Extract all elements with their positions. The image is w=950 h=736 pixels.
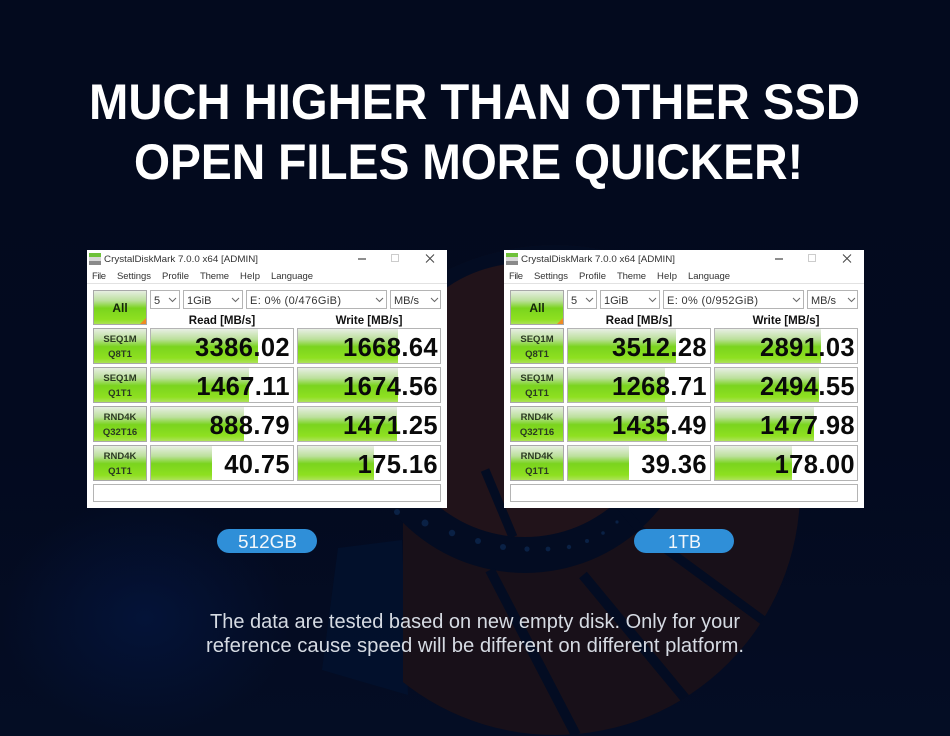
menu bar: Profile (162, 271, 189, 282)
row: SEQ1M Q8T1: 3512.28 (612, 334, 707, 362)
title: MUCH HIGHER THAN OTHER SSD (89, 74, 860, 130)
row: RND4K Q1T1: 175.16 (358, 451, 438, 479)
label: 1TB: 1TB (668, 532, 701, 552)
menu bar: Settings (117, 271, 151, 282)
label: 512GB: 512GB (238, 532, 297, 552)
row: RND4K Q32T16: 1435.49 (612, 412, 707, 440)
row: RND4K Q1T1: 39.36 (641, 451, 707, 479)
menu bar (92, 271, 313, 282)
row: SEQ1M Q1T1 (94, 368, 440, 402)
row: RND4K Q32T16: RND4K (104, 412, 136, 423)
all button: All (112, 301, 128, 315)
row: RND4K Q32T16: 1477.98 (760, 412, 855, 440)
menu bar: Settings (534, 271, 568, 282)
menu bar (509, 271, 730, 282)
dropdowns: 5 (571, 295, 577, 307)
dropdowns: MB/s (811, 295, 837, 307)
window controls (358, 254, 434, 262)
column headers (606, 315, 820, 327)
row: RND4K Q32T16: 1471.25 (343, 412, 438, 440)
disclaimer text (206, 611, 744, 657)
row: RND4K Q32T16 (510, 406, 858, 442)
row: RND4K Q1T1 (510, 446, 858, 480)
background (22, 264, 800, 735)
column headers: Write [MB/s] (336, 315, 403, 327)
disclaimer text: The data are tested based on new empty disk. Only for your (210, 611, 740, 633)
row: SEQ1M Q8T1: SEQ1M (103, 334, 137, 345)
menu bar: Theme (617, 271, 646, 282)
dropdowns (150, 290, 440, 308)
menu bar: Theme (200, 271, 229, 282)
status box (510, 484, 858, 502)
column headers (189, 315, 403, 327)
panel: CrystalDiskMark 1TB (504, 250, 864, 508)
menu bar: Help (657, 271, 677, 282)
row: RND4K Q1T1: RND4K (521, 451, 553, 462)
dropdowns: 1GiB (604, 295, 628, 307)
panel: CrystalDiskMark 512GB (87, 250, 447, 508)
dropdowns: 5 (154, 295, 160, 307)
dropdowns (568, 290, 858, 308)
column headers: Write [MB/s] (753, 315, 820, 327)
status box (94, 484, 440, 502)
window title: CrystalDiskMark 7.0.0 x64 [ADMIN] (104, 254, 258, 265)
row: SEQ1M Q1T1: SEQ1M (103, 373, 137, 384)
app icon (89, 253, 101, 265)
row: RND4K Q1T1: Q1T1 (525, 466, 550, 477)
menu bar: Language (271, 271, 313, 282)
dropdowns: 1GiB (187, 295, 211, 307)
column headers: Read [MB/s] (189, 315, 255, 327)
menu bar: File (509, 271, 523, 282)
row: RND4K Q32T16: 888.79 (210, 412, 290, 440)
label: 512GB (217, 529, 317, 553)
all button: All (529, 301, 545, 315)
row: RND4K Q1T1: RND4K (104, 451, 136, 462)
row: SEQ1M Q1T1: Q1T1 (108, 388, 133, 399)
menu bar: File (92, 271, 106, 282)
row: SEQ1M Q8T1: Q8T1 (108, 349, 133, 360)
row: SEQ1M Q1T1: 1674.56 (343, 373, 438, 401)
label: 1TB (634, 529, 734, 553)
row: RND4K Q32T16: Q32T16 (520, 427, 554, 438)
all button (94, 290, 146, 324)
row: RND4K Q1T1: Q1T1 (108, 466, 133, 477)
menu bar: Profile (579, 271, 606, 282)
window title: CrystalDiskMark 7.0.0 x64 [ADMIN] (521, 254, 675, 265)
title (89, 74, 860, 190)
row: SEQ1M Q8T1: 3386.02 (195, 334, 290, 362)
disclaimer text: reference cause speed will be different on different platform. (206, 635, 744, 657)
column headers: Read [MB/s] (606, 315, 672, 327)
menu bar: Help (240, 271, 260, 282)
window controls (775, 254, 851, 262)
row: SEQ1M Q8T1 (510, 328, 858, 364)
row: RND4K Q32T16: Q32T16 (103, 427, 137, 438)
dropdowns: E: 0% (0/952GiB) (667, 295, 758, 307)
row: SEQ1M Q1T1: 1467.11 (196, 373, 290, 401)
row: RND4K Q1T1 (94, 446, 440, 480)
row: SEQ1M Q8T1: 1668.64 (343, 334, 438, 362)
row: SEQ1M Q8T1: Q8T1 (525, 349, 550, 360)
row: SEQ1M Q1T1: 2494.55 (760, 373, 855, 401)
all button (510, 290, 564, 324)
row: SEQ1M Q1T1: 1268.71 (612, 373, 707, 401)
menu bar: Language (688, 271, 730, 282)
title: OPEN FILES MORE QUICKER! (134, 134, 803, 190)
dropdowns: MB/s (394, 295, 420, 307)
row: SEQ1M Q1T1: Q1T1 (525, 388, 550, 399)
dropdowns: E: 0% (0/476GiB) (250, 295, 341, 307)
row: RND4K Q32T16 (94, 406, 440, 442)
row: SEQ1M Q1T1 (510, 368, 858, 402)
row: SEQ1M Q8T1: 2891.03 (760, 334, 855, 362)
row: RND4K Q1T1: 178.00 (775, 451, 855, 479)
row: SEQ1M Q8T1: SEQ1M (520, 334, 554, 345)
row: SEQ1M Q1T1: SEQ1M (520, 373, 554, 384)
app icon (506, 253, 518, 265)
row: SEQ1M Q8T1 (94, 328, 440, 364)
row: RND4K Q32T16: RND4K (521, 412, 553, 423)
row: RND4K Q1T1: 40.75 (224, 451, 290, 479)
